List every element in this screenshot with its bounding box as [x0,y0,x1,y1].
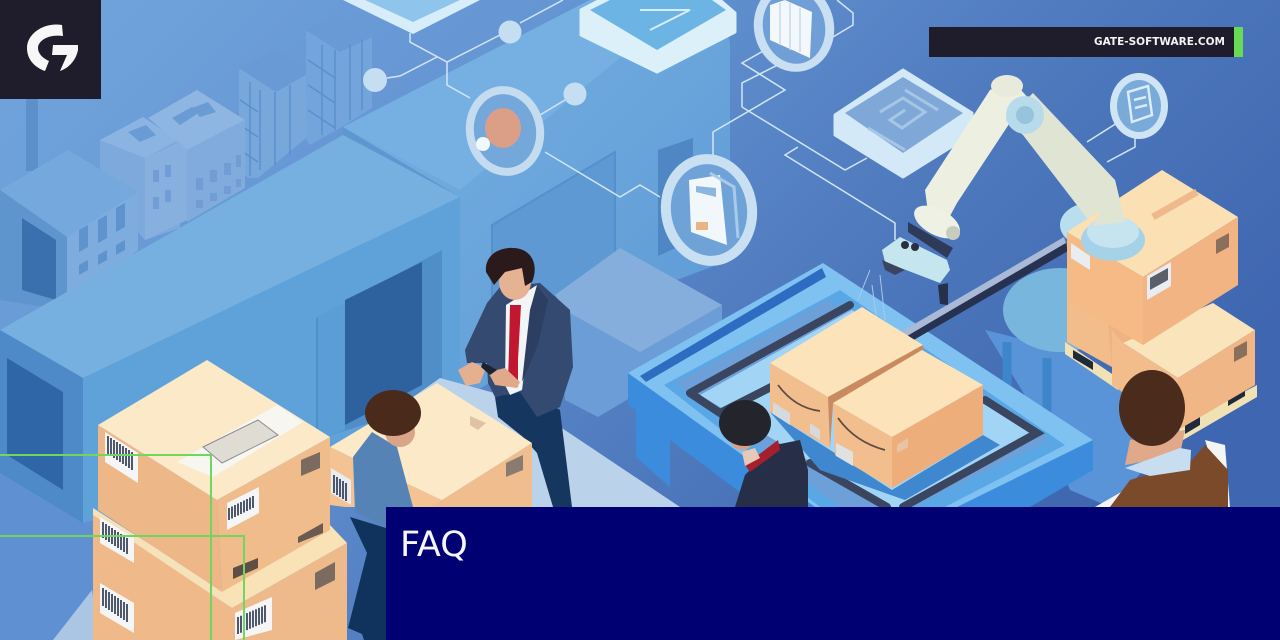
floating icon: top left tile [343,0,480,34]
floating icon: server circle [746,0,842,79]
heading: FAQ [400,525,468,565]
aisle floor light strip [345,378,680,507]
outlined frame, second [0,535,245,640]
website badge [929,27,1234,57]
worker in suit, standing [458,248,573,507]
FAQ panel [386,507,1280,640]
carton behind blue-shirt worker [330,383,532,507]
network node dots [363,20,586,106]
stacked cartons right [1065,170,1257,440]
website badge: GATE-SOFTWARE.COM [1094,36,1225,48]
worker back view, right [1095,370,1230,507]
floor left [0,473,93,640]
logo panel [0,0,101,99]
conveyor table [628,263,1093,507]
barcode labels [100,432,272,640]
cartons on conveyor [770,307,983,488]
floating icon: chip circle [1110,73,1168,139]
round table and floor patch [985,268,1180,507]
upper warehouse building [343,0,730,400]
floating icon: fingerprint circle [459,80,551,182]
pole [26,99,38,171]
floating icon: circuit tile [581,0,735,72]
floating icon: document tile [835,70,972,177]
floating icon: card circle [654,148,764,272]
upper carton [98,360,330,592]
carton stack left [93,360,347,640]
tech network lines [387,0,1135,240]
front left block [0,150,138,310]
loading platform [555,248,722,417]
background towers [239,14,372,178]
floor light strip bottom left [53,590,100,640]
badge green accent [1234,27,1243,57]
icon: G logo [27,24,78,71]
main warehouse long building [0,135,460,523]
lower carton [93,508,347,640]
worker in blue shirt [348,390,421,640]
outlined frame, first [0,454,212,640]
seated worker, centre [719,400,808,507]
robot arm rail [899,237,1068,345]
background office blocks [100,90,245,240]
robot arm [858,75,1125,330]
